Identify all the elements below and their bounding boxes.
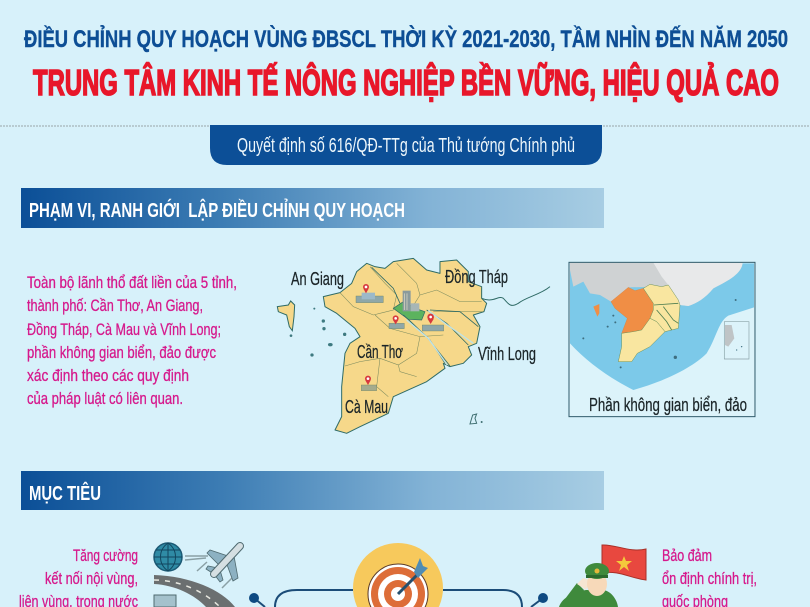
decision number pill: Quyết định số 616/QĐ-TTg của Thủ tướng Chính phủ <box>237 135 575 157</box>
text block: scope description: phần không gian biển, đảo được <box>27 343 216 362</box>
section heading: objectives <box>21 471 604 510</box>
icon: airplane <box>185 546 240 588</box>
section heading: scope and boundaries <box>21 188 604 228</box>
icon: location pin Vinh Long <box>422 314 444 331</box>
map label: Can Tho: Cần Thơ <box>357 342 403 362</box>
text block: scope description: Toàn bộ lãnh thổ đất liền của 5 tỉnh, <box>27 273 237 292</box>
text block: scope description: của pháp luật có liên quan. <box>27 389 183 408</box>
section heading: objectives: MỤC TIÊU <box>29 481 101 505</box>
text block: scope description: thành phố: Cần Thơ, An Giang, <box>27 296 203 315</box>
text block: stability and defense objective <box>662 546 757 607</box>
text block: scope description <box>27 273 237 408</box>
icon: target with arrow <box>353 543 443 607</box>
icon: location pin An Giang <box>356 284 383 303</box>
decision number pill <box>210 125 602 165</box>
text block: scope description: xác định theo các quy định <box>27 366 189 385</box>
map label: Ca Mau: Cà Mau <box>345 397 388 417</box>
icon: Vietnam flag <box>602 545 646 580</box>
inset map: maritime space and islands <box>569 262 755 417</box>
icon: central city tower <box>403 291 419 311</box>
map label: Dong Thap: Đồng Tháp <box>445 267 508 287</box>
text block: scope description: Đồng Tháp, Cà Mau và Vĩnh Long; <box>27 320 221 339</box>
text block: stability and defense objective: Bảo đảm <box>662 546 712 565</box>
icon: curved road <box>154 575 235 607</box>
connector: left objective line <box>249 590 353 607</box>
icon: location pin Can Tho <box>389 315 404 329</box>
connector: right objective line <box>443 590 548 607</box>
map label: An Giang: An Giang <box>291 269 344 289</box>
icon: globe <box>154 543 182 571</box>
map label: Vinh Long: Vĩnh Long <box>478 344 536 364</box>
inset caption: Phần không gian biển, đảo <box>589 395 747 415</box>
section heading: scope and boundaries: PHẠM VI, RANH GIỚI LẬP ĐIỀU CHỈNH QUY HOẠCH <box>29 198 405 222</box>
text block: connectivity objective: kết nối nội vùng, <box>45 569 138 588</box>
icon: location pin Ca Mau <box>361 376 377 391</box>
text block: stability and defense objective: ổn định chính trị, <box>662 569 757 588</box>
map: Mekong Delta region <box>277 258 550 433</box>
text block: connectivity objective: Tăng cường <box>73 546 138 565</box>
icon: saluting soldier <box>559 563 618 607</box>
text block: connectivity objective <box>19 546 138 607</box>
